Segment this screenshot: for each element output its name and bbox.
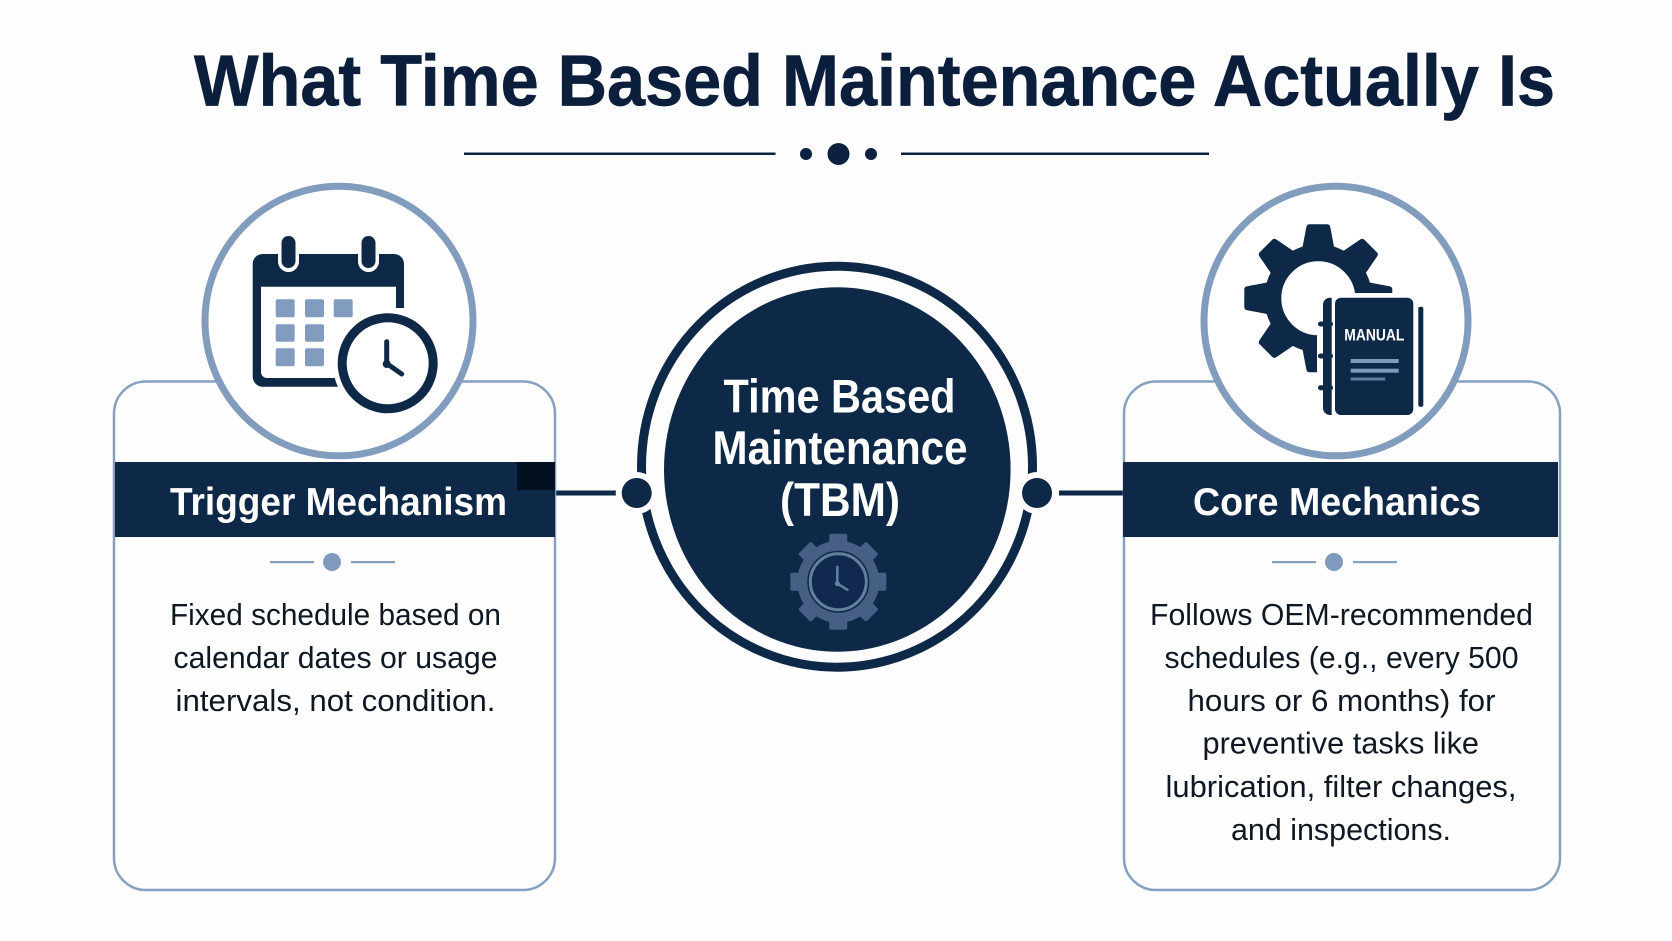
inner disc — [664, 287, 1011, 652]
body text — [1150, 597, 1533, 847]
body text: Fixed schedule based on — [170, 597, 501, 632]
panel: trigger mechanism — [114, 186, 555, 890]
body text — [170, 597, 501, 718]
ring gaps — [616, 472, 1058, 514]
body text: schedules (e.g., every 500 — [1164, 640, 1518, 675]
outer ring — [642, 266, 1032, 667]
icon circle ring — [1204, 186, 1468, 456]
card frame — [1124, 382, 1560, 890]
icon circle — [205, 186, 473, 456]
body text: lubrication, filter changes, — [1166, 769, 1516, 804]
body text: calendar dates or usage — [174, 640, 498, 675]
body text: Follows OEM-recommended — [1150, 597, 1533, 632]
title divider — [464, 143, 1209, 165]
right node — [1022, 478, 1052, 508]
icon circle — [1204, 186, 1468, 456]
icon: gear clock — [790, 534, 886, 630]
body text: intervals, not condition. — [176, 683, 496, 718]
title: What Time Based Maintenance Actually Is — [194, 42, 1555, 122]
heading band: Trigger Mechanism — [170, 481, 507, 524]
heading band: Core Mechanics — [1193, 481, 1481, 524]
heading band — [1123, 462, 1558, 537]
left node — [622, 478, 652, 508]
card frame — [114, 382, 555, 890]
connector: left — [555, 490, 616, 496]
center label: Time Based — [724, 370, 956, 423]
center label: (TBM) — [780, 473, 900, 526]
icon: gear and manual: MANUAL — [1344, 326, 1404, 345]
separator — [270, 553, 395, 571]
panel: core mechanics — [1123, 186, 1560, 890]
center label — [712, 370, 968, 526]
center label: Maintenance — [712, 421, 968, 474]
heading band — [115, 462, 555, 537]
connector: right — [1059, 490, 1123, 496]
center hub — [616, 266, 1058, 667]
icon: calendar with clock — [253, 232, 443, 418]
body text: hours or 6 months) for — [1188, 683, 1496, 718]
body text: preventive tasks like — [1202, 726, 1479, 760]
icon: gear and manual — [1244, 224, 1429, 421]
separator — [1272, 553, 1397, 571]
body text: and inspections. — [1231, 812, 1451, 847]
